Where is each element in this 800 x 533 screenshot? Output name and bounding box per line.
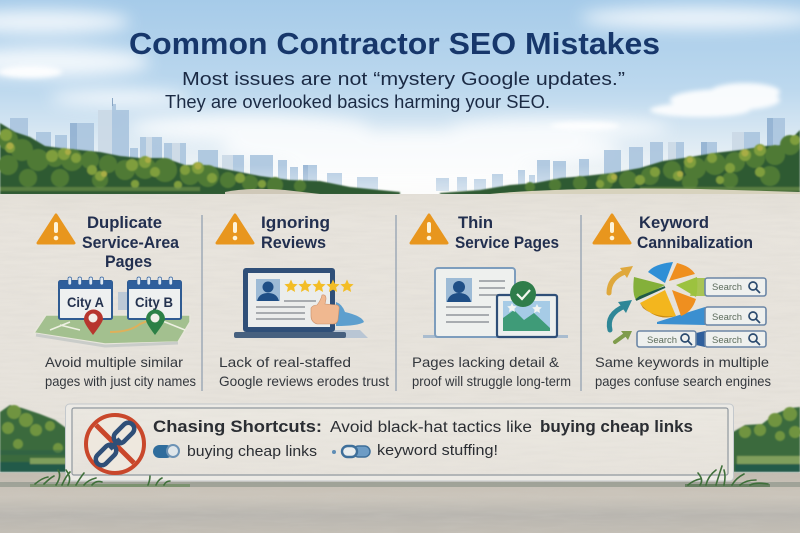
illustration: pie chart, arrows and search bars: Search xyxy=(712,312,742,323)
illustration: map with city cards and pins xyxy=(34,277,190,346)
callout text xyxy=(153,418,693,460)
bottom trees left xyxy=(0,405,66,472)
heading: Cannibalization xyxy=(637,234,753,252)
gravel path xyxy=(0,473,800,533)
description xyxy=(595,354,771,389)
icon: warning triangle xyxy=(217,215,253,243)
illustration: pie chart, arrows and search bars: Search xyxy=(712,335,742,346)
heading: Pages xyxy=(105,253,152,271)
grass tufts xyxy=(30,466,770,487)
subtitle: Most issues are not “mystery Google updates.” xyxy=(182,68,625,89)
description: Avoid multiple similar xyxy=(45,354,183,370)
heading: Service-Area xyxy=(82,234,180,252)
heading: Ignoring xyxy=(261,214,330,232)
icon: small links xyxy=(153,445,179,458)
column dividers xyxy=(202,215,581,391)
panel: ignoring reviews xyxy=(217,214,389,389)
heading: Thin xyxy=(458,214,493,232)
heading xyxy=(455,214,559,252)
heading xyxy=(82,214,180,271)
heading xyxy=(261,214,330,252)
illustration: pie chart, arrows and search bars: Search xyxy=(647,335,677,346)
icon: warning triangle xyxy=(411,215,447,243)
callout text: Chasing Shortcuts: xyxy=(153,418,322,436)
description xyxy=(412,354,571,389)
illustration: document with photo and check xyxy=(423,268,568,338)
description: pages with just city names xyxy=(45,373,196,389)
heading: Service Pages xyxy=(455,234,559,252)
search bars xyxy=(637,278,766,347)
description: Pages lacking detail & xyxy=(412,354,560,370)
heading: Keyword xyxy=(639,214,709,232)
illustration: pie chart, arrows and search bars xyxy=(609,262,766,347)
illustration: map with city cards and pins: City A xyxy=(67,295,104,310)
description: pages confuse search engines xyxy=(595,373,771,389)
illustration: map with city cards and pins: City B xyxy=(135,295,173,310)
panel: thin service pages xyxy=(411,214,571,389)
illustration: laptop with review and thumbs up xyxy=(234,268,368,338)
illustration: pie chart, arrows and search bars: Search xyxy=(712,282,742,293)
trees xyxy=(0,123,800,195)
description: Same keywords in multiple xyxy=(595,354,769,370)
icon: warning triangle xyxy=(594,215,630,243)
far meadow and rocks xyxy=(225,188,800,195)
description xyxy=(219,354,389,389)
callout text: Avoid black-hat tactics like xyxy=(330,419,532,436)
callout: chasing shortcuts xyxy=(66,404,734,481)
bottom trees right xyxy=(733,407,800,472)
heading: Duplicate xyxy=(87,214,162,232)
description: Lack of real-staffed xyxy=(219,354,351,370)
description: Google reviews erodes trust xyxy=(219,373,389,389)
city skyline xyxy=(10,98,785,195)
callout text: buying cheap links xyxy=(540,418,693,436)
panel: duplicate service-area pages xyxy=(34,214,196,389)
panel: keyword cannibalization xyxy=(594,214,771,389)
description: proof will struggle long-term xyxy=(412,373,571,389)
heading xyxy=(637,214,753,252)
callout text: keyword stuffing! xyxy=(377,443,498,459)
title: Common Contractor SEO Mistakes xyxy=(129,26,660,61)
callout text: buying cheap links xyxy=(187,444,317,460)
sand ground xyxy=(0,194,800,484)
sky background xyxy=(0,0,800,196)
icon: no broken link xyxy=(86,415,144,473)
heading: Reviews xyxy=(261,234,326,252)
arrows xyxy=(609,272,626,342)
subtitle xyxy=(165,68,625,112)
description xyxy=(45,354,196,389)
icon: small chain xyxy=(332,446,370,457)
icon: warning triangle xyxy=(38,215,74,243)
subtitle: They are overlooked basics harming your SEO. xyxy=(165,91,550,112)
